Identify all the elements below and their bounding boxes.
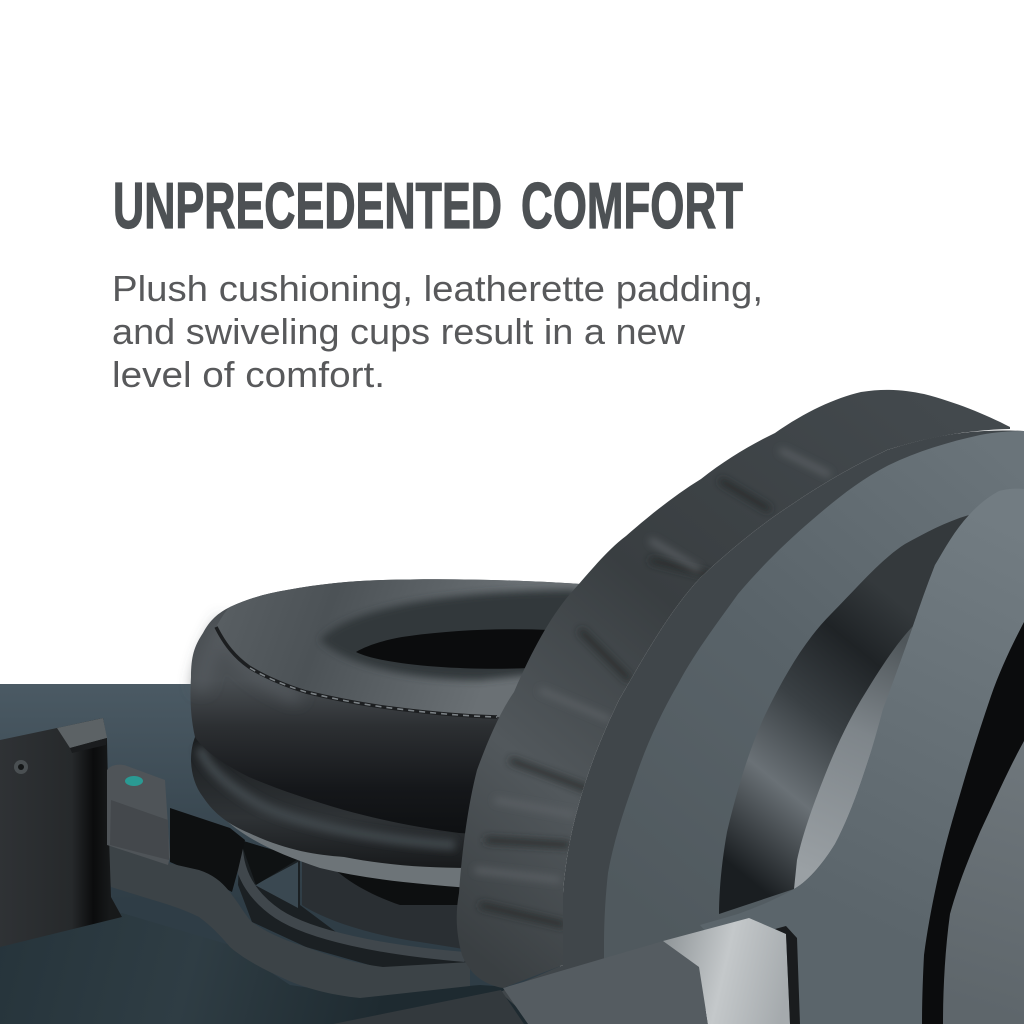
right ear cup <box>943 741 1024 1024</box>
grey base strip <box>195 780 470 888</box>
recess silver crescent <box>794 626 913 889</box>
black divider <box>775 926 800 1024</box>
body text: Plush cushioning, leatherette padding, <box>112 268 763 309</box>
grey segment <box>503 941 708 1024</box>
table gap under mount <box>255 862 298 908</box>
dark left segment <box>333 990 524 1024</box>
dark fabric base <box>0 913 560 1024</box>
ear opening <box>356 629 550 669</box>
left edge highlight <box>200 630 300 697</box>
table surface <box>0 684 560 1024</box>
black bracket <box>170 808 245 892</box>
upper ear cushion <box>190 579 580 835</box>
yoke body <box>0 718 122 947</box>
teal indicator <box>125 776 143 786</box>
swivel ring <box>238 838 465 957</box>
dark housing ring <box>500 430 1024 1010</box>
swivel connector <box>107 765 170 865</box>
screw <box>14 760 28 774</box>
headband arm right <box>700 489 1024 1024</box>
upright ear pad <box>457 390 1010 988</box>
pad creases <box>475 450 830 925</box>
inner driver recess <box>719 515 969 914</box>
inner slope <box>320 590 578 680</box>
cylinder <box>302 858 470 950</box>
stitching <box>216 627 497 717</box>
silver segment <box>663 918 790 1024</box>
lower cushion <box>191 730 480 868</box>
title: COMFORT <box>521 169 743 242</box>
title: UNPRECEDENTED <box>113 169 502 242</box>
lower ear cushion <box>191 730 480 888</box>
black gap <box>915 615 1024 1024</box>
shadow under mount <box>238 840 470 985</box>
black shadow wedge <box>240 840 300 885</box>
headband arm lower left <box>107 845 470 998</box>
cushion base <box>190 579 580 835</box>
bottom band <box>333 918 800 1024</box>
body text <box>112 268 763 395</box>
headphone housing band <box>604 431 1024 1010</box>
body text: and swiveling cups result in a new <box>112 311 686 352</box>
body text: level of comfort. <box>112 354 385 395</box>
pad shape <box>457 390 1010 988</box>
swivel mount behind ear pad <box>238 838 470 985</box>
yoke hinge <box>0 718 170 947</box>
chrome top <box>57 718 107 748</box>
cushion top surface <box>216 579 580 720</box>
